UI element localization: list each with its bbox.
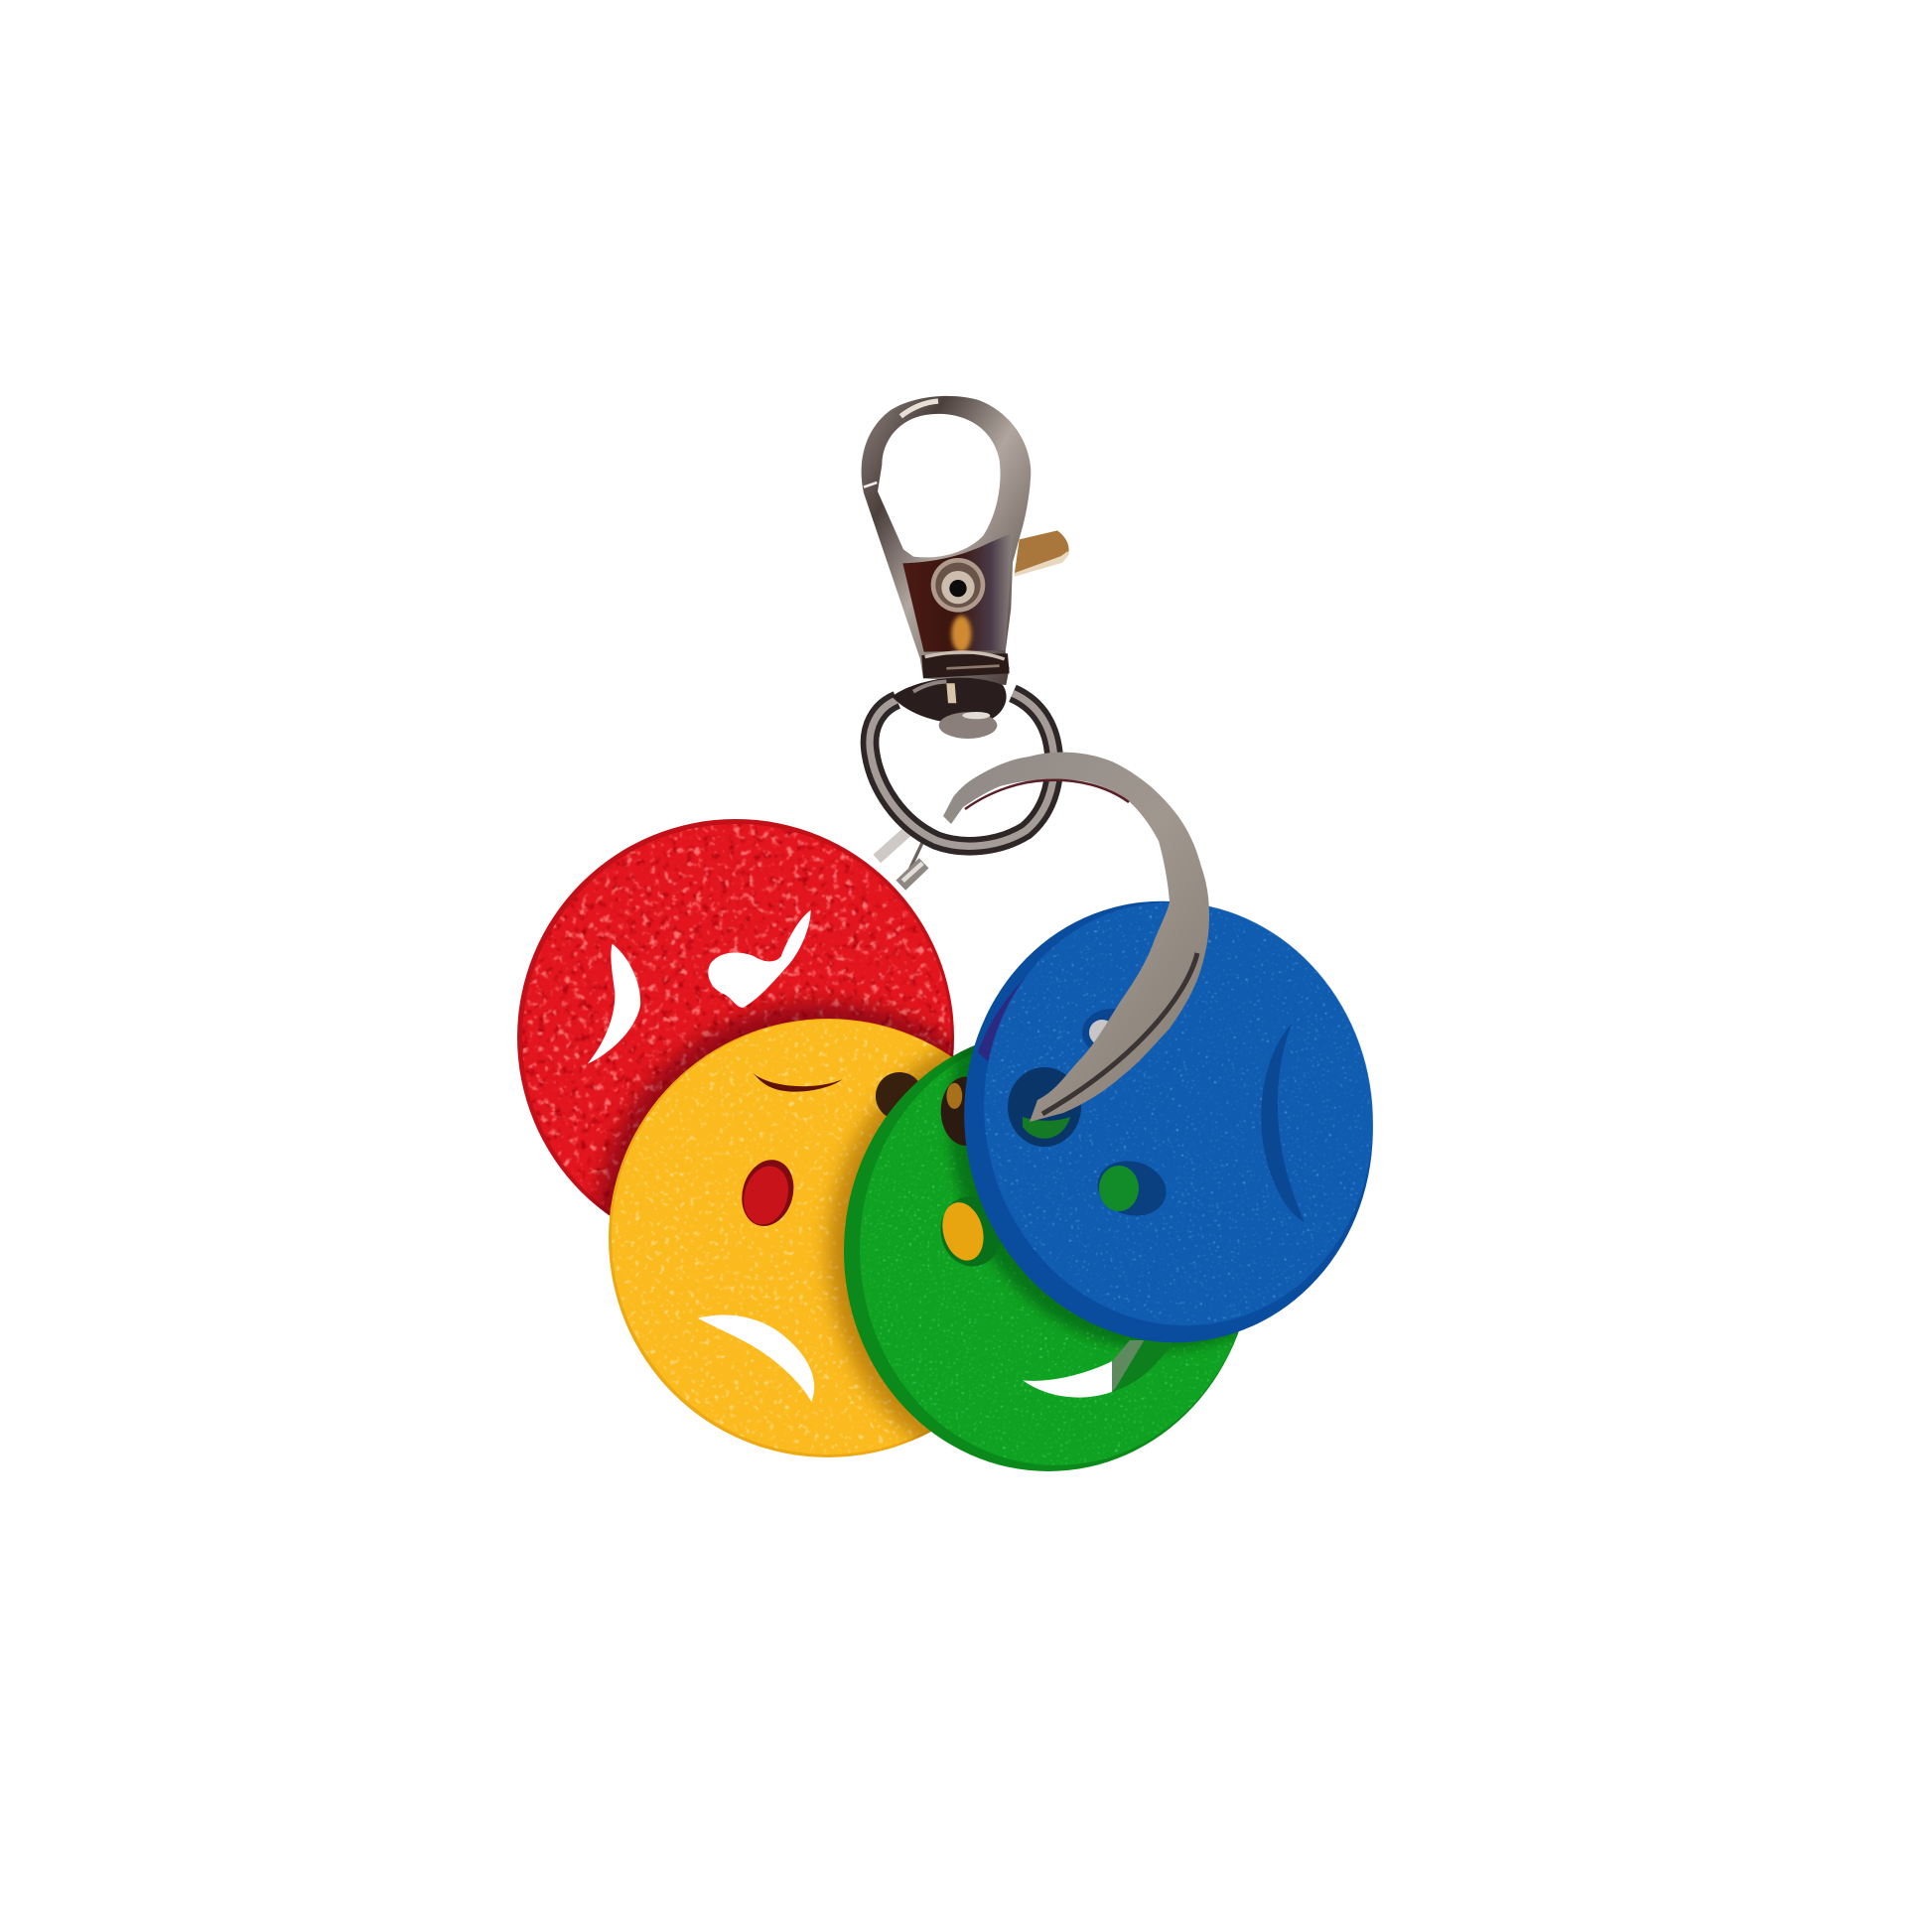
icon: blue sad emoji disc [923, 863, 1414, 1381]
clasp rivet [931, 558, 985, 613]
yellow disc upper right eye hole [876, 1072, 923, 1120]
red disc left eye cut-out [588, 944, 640, 1064]
swivel head [892, 678, 1007, 739]
icon: connecting pin behind red disc [877, 825, 925, 886]
icon: red angry emoji disc [517, 819, 954, 1216]
yellow disc eye hole [735, 1154, 801, 1232]
clasp body [902, 533, 1013, 652]
icon: split key ring [943, 753, 1209, 1122]
red disc right eye and mouth cut-out [708, 910, 811, 1008]
split ring inner shadow [965, 780, 1129, 809]
bronze reflection [951, 616, 971, 652]
icon: lobster clasp [862, 396, 1069, 846]
split ring outer bevel [1042, 953, 1197, 1114]
green disc upper eye hole [941, 1077, 991, 1146]
product illustration: keychain with four emoji discs [517, 395, 1374, 1471]
clasp tab [1015, 530, 1069, 575]
lower D-ring [870, 693, 1054, 846]
yellow disc mouth cut-out [698, 1314, 814, 1402]
blue disc small eye hole [1091, 1154, 1173, 1223]
clasp highlight [900, 401, 938, 416]
green disc lower eye hole [932, 1188, 1010, 1275]
blue disc brow slit [1261, 1024, 1305, 1222]
clasp loop [862, 396, 1031, 685]
icon: yellow sad emoji disc [609, 1019, 951, 1457]
blue disc back slot and metal ball [1082, 1009, 1142, 1056]
blue disc large eye hole [1008, 1067, 1081, 1147]
clasp gate gap [864, 483, 877, 487]
clasp collar [921, 652, 1010, 678]
yellow disc brow slit [753, 1073, 842, 1092]
green disc mouth cut-out [1023, 1340, 1174, 1398]
icon: green smiling emoji disc [844, 1044, 1239, 1471]
